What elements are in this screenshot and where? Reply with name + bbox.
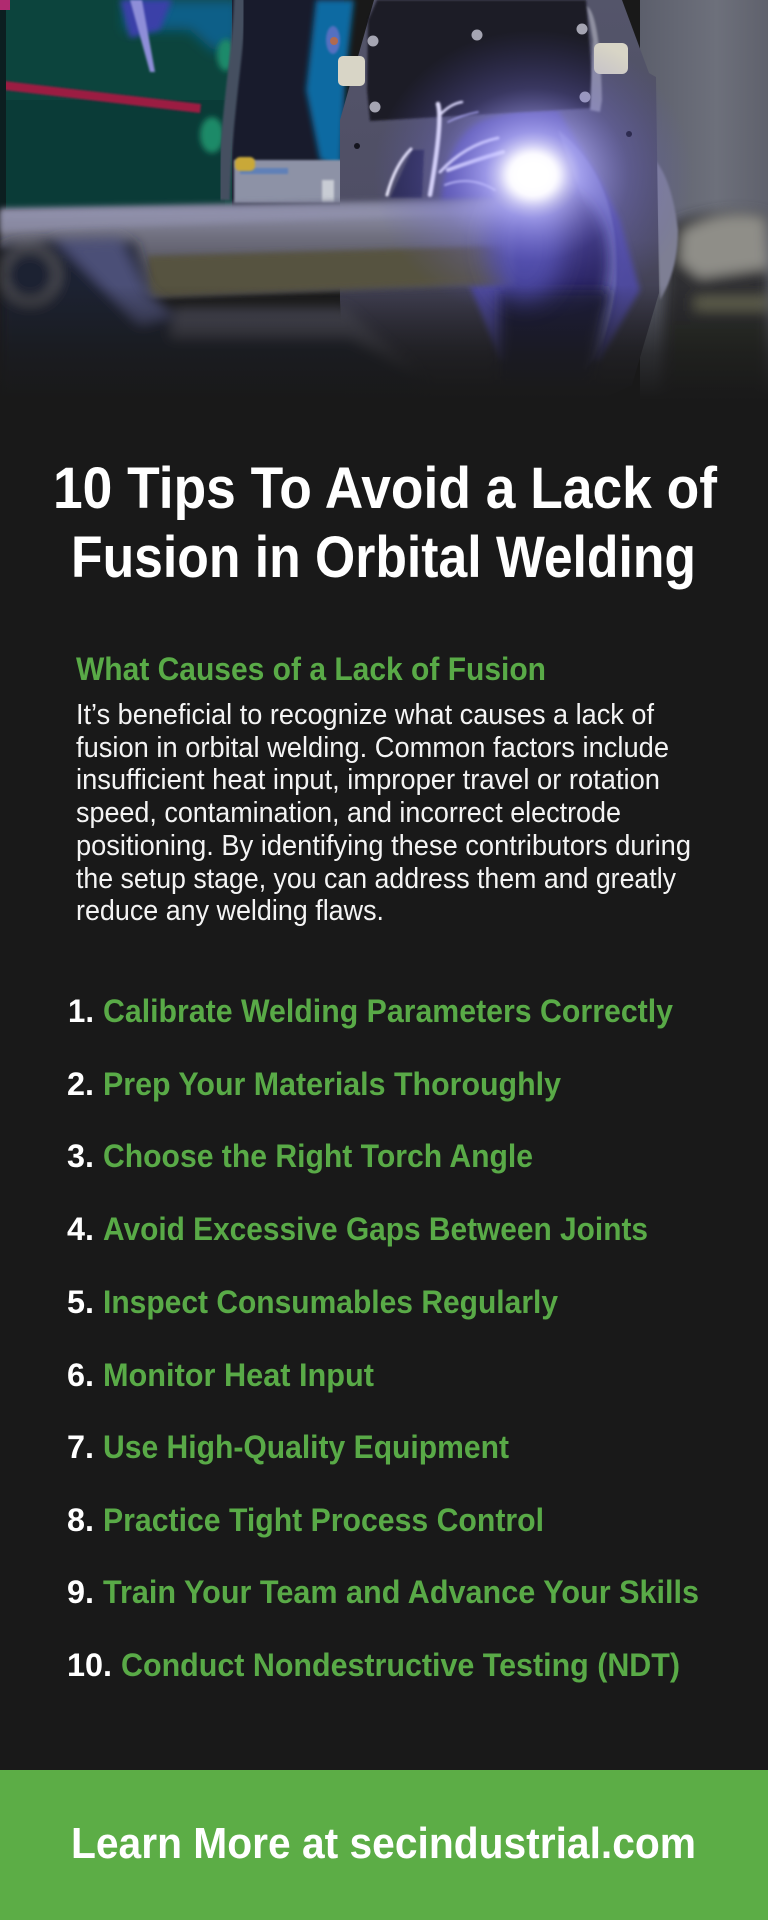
tip 4: Avoid Excessive Gaps Between Joints — [103, 1211, 648, 1247]
background silver cylinder — [234, 157, 342, 203]
main pipe — [0, 187, 563, 303]
machine glow disc — [390, 110, 640, 380]
intro paragraph: It’s beneficial to recognize what causes a lack of — [76, 699, 655, 731]
tip 6: 6. — [67, 1357, 94, 1393]
tip 1: 1. — [68, 993, 94, 1029]
intro paragraph: speed, contamination, and incorrect electrode — [76, 797, 621, 829]
tip 4: 4. — [67, 1211, 94, 1247]
intro paragraph: fusion in orbital welding. Common factors include — [76, 732, 669, 764]
intro paragraph: insufficient heat input, improper travel or rotation — [76, 764, 660, 796]
blurred object on the right — [660, 212, 768, 400]
intro paragraph: the setup stage, you can address them and greatly — [76, 863, 676, 895]
hero photo: orbital welding machine — [0, 0, 768, 400]
intro heading: What Causes of a Lack of Fusion — [76, 651, 546, 687]
intro paragraph — [76, 699, 691, 927]
intro paragraph: positioning. By identifying these contributors during — [76, 830, 691, 862]
tip 8: 8. — [67, 1502, 94, 1538]
tip 10: 10. — [67, 1647, 112, 1683]
footer call to action band: Learn More at secindustrial.com — [71, 1819, 696, 1868]
weld spatter streaks — [387, 102, 503, 195]
orbital machine plate — [340, 0, 659, 400]
tip 9: 9. — [67, 1574, 94, 1610]
knurled knobs — [338, 43, 628, 86]
tip 2: Prep Your Materials Thoroughly — [103, 1066, 561, 1102]
screws — [368, 24, 590, 112]
title: 10 Tips To Avoid a Lack of — [53, 456, 718, 521]
title: Fusion in Orbital Welding — [71, 525, 696, 590]
tip 6: Monitor Heat Input — [103, 1357, 374, 1393]
intro paragraph: reduce any welding flaws. — [76, 895, 384, 927]
tip 8: Practice Tight Process Control — [103, 1502, 544, 1538]
plate outer rim — [655, 160, 678, 300]
title — [53, 456, 718, 590]
tip 5: 5. — [67, 1284, 94, 1320]
list of 10 tips — [67, 993, 699, 1683]
tip 5: Inspect Consumables Regularly — [103, 1284, 558, 1320]
fade to dark panel — [0, 285, 768, 400]
tip 10: Conduct Nondestructive Testing (NDT) — [121, 1647, 680, 1683]
tip 9: Train Your Team and Advance Your Skills — [103, 1574, 699, 1610]
footer call to action band — [0, 1770, 768, 1920]
dark operator clothing and blue sleeve — [232, 0, 354, 215]
tip 7: Use High-Quality Equipment — [103, 1429, 509, 1465]
right background wall — [640, 0, 768, 400]
blurred foreground clamp — [0, 232, 374, 350]
welding arc glow — [388, 40, 675, 304]
jacket: green work clothing — [0, 0, 240, 210]
cable — [224, 0, 240, 200]
tip 3: 3. — [67, 1138, 94, 1174]
tip 7: 7. — [67, 1429, 94, 1465]
black mounting panel — [367, 0, 593, 121]
tip 1: Calibrate Welding Parameters Correctly — [103, 993, 673, 1029]
tip 3: Choose the Right Torch Angle — [103, 1138, 533, 1174]
plate holes — [354, 131, 632, 149]
tip 2: 2. — [67, 1066, 94, 1102]
